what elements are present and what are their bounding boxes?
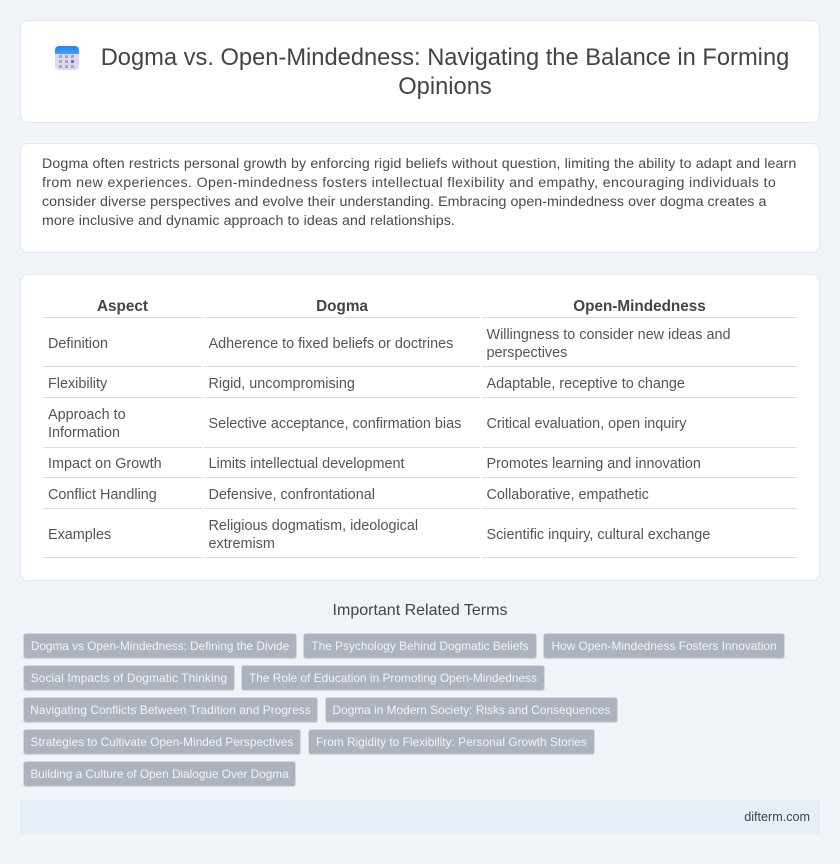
row: conflict handling: [48, 487, 649, 503]
tag list: Dogma vs Open-Mindedness: Defining the Divide: [31, 639, 289, 653]
row: impact on growth: Impact on Growth: [48, 456, 162, 472]
tag list: [23, 633, 785, 787]
row: examples: [48, 518, 710, 552]
row: definition: perspectives: [486, 345, 567, 361]
row: definition: [48, 327, 730, 361]
row: conflict handling: Collaborative, empathetic: [486, 487, 649, 503]
panel: comparison table: [20, 274, 820, 581]
table header: Aspect: [97, 298, 148, 315]
text block: intro: from new experiences. Open-mindedness fosters intellectual flexibility and empathy, encouraging individuals to: [42, 175, 776, 191]
table header: Open-Mindedness: [573, 298, 706, 315]
row: examples: extremism: [208, 536, 275, 552]
footer brand: difterm.com: [744, 810, 810, 824]
icon: calendar: [55, 46, 79, 70]
row: flexibility: Flexibility: [48, 376, 107, 392]
row: flexibility: Rigid, uncompromising: [208, 376, 355, 392]
title: Dogma vs. Open-Mindedness: Navigating the Balance in Forming: [101, 45, 789, 71]
row: examples: Religious dogmatism, ideological: [208, 518, 418, 534]
row: definition: Definition: [48, 336, 108, 352]
row: approach to information: [48, 407, 686, 441]
tag list: Social Impacts of Dogmatic Thinking: [31, 671, 227, 685]
tag list: From Rigidity to Flexibility: Personal Growth Stories: [316, 735, 587, 749]
row: examples: Scientific inquiry, cultural exchange: [486, 527, 710, 543]
table header: [97, 298, 706, 315]
row: approach to information: Information: [48, 425, 120, 441]
row: flexibility: [48, 376, 685, 392]
tag list: The Psychology Behind Dogmatic Beliefs: [311, 639, 529, 653]
row: examples: Examples: [48, 527, 111, 543]
text block: intro: Dogma often restricts personal growth by enforcing rigid beliefs without question, limiting the ability to adapt and learn: [42, 156, 796, 172]
text block: intro: consider diverse perspectives and evolve their understanding. Embracing open-mindedness over dogma creates a: [42, 194, 766, 210]
panel: intro: [20, 143, 820, 253]
row: approach to information: Approach to: [48, 407, 126, 423]
tag list: Navigating Conflicts Between Tradition and Progress: [30, 703, 311, 717]
panel: header: [20, 20, 820, 123]
heading: related terms: Important Related Terms: [333, 602, 507, 619]
tag list: Building a Culture of Open Dialogue Over Dogma: [30, 767, 289, 781]
row: approach to information: Selective acceptance, confirmation bias: [208, 416, 461, 432]
title: Opinions: [398, 74, 492, 100]
text block: intro: [42, 156, 796, 229]
title: [101, 45, 789, 100]
tag list: Dogma in Modern Society: Risks and Consequences: [333, 703, 610, 717]
tag list: The Role of Education in Promoting Open-Mindedness: [249, 671, 537, 685]
footer bar: [20, 800, 820, 834]
row: flexibility: Adaptable, receptive to change: [486, 376, 685, 392]
row: impact on growth: [48, 456, 701, 472]
row: conflict handling: Defensive, confrontational: [208, 487, 375, 503]
row: conflict handling: Conflict Handling: [48, 487, 157, 503]
row: approach to information: Critical evaluation, open inquiry: [486, 416, 686, 432]
tag list: Strategies to Cultivate Open-Minded Perspectives: [31, 735, 293, 749]
table header: Dogma: [316, 298, 368, 315]
row: definition: Adherence to fixed beliefs or doctrines: [208, 336, 453, 352]
text block: intro: more inclusive and dynamic approach to ideas and relationships.: [42, 213, 455, 229]
row: impact on growth: Limits intellectual development: [208, 456, 404, 472]
tag list: How Open-Mindedness Fosters Innovation: [551, 639, 777, 653]
row: impact on growth: Promotes learning and innovation: [486, 456, 701, 472]
row: definition: Willingness to consider new ideas and: [486, 327, 730, 343]
